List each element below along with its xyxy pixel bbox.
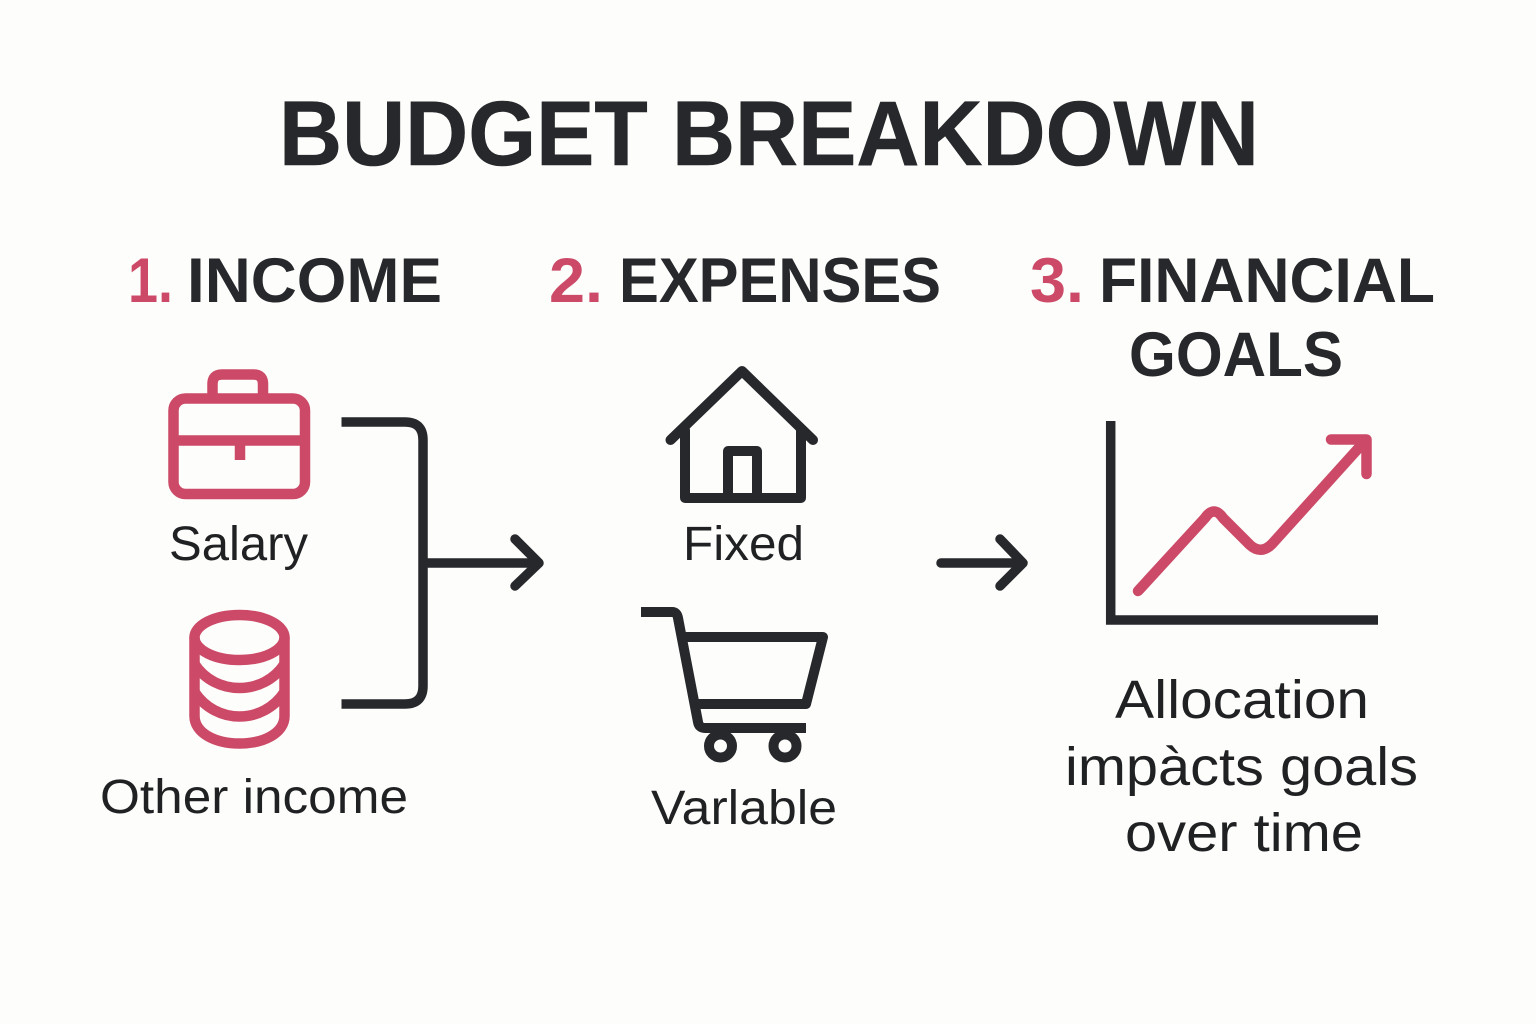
text: allocation note: Allocation	[1115, 670, 1369, 730]
icon: shopping cart	[641, 612, 823, 758]
text: allocation note: impàcts goals	[1065, 737, 1418, 797]
heading: financial goals: GOALS	[1129, 320, 1343, 390]
icon: coin stack	[194, 615, 284, 744]
icon: briefcase	[174, 374, 305, 494]
label: fixed: Fixed	[683, 518, 804, 571]
text: allocation note: over time	[1125, 803, 1363, 863]
axes	[1111, 421, 1378, 620]
heading: expenses: EXPENSES	[619, 246, 941, 316]
arrow: expenses to goals	[941, 539, 1023, 586]
heading: financial goals: FINANCIAL	[1099, 246, 1435, 316]
text: allocation note	[1065, 670, 1418, 863]
heading: expenses: 2.	[549, 246, 603, 316]
label: salary: Salary	[169, 518, 308, 571]
label: variable: Varlable	[651, 782, 837, 835]
heading: income: INCOME	[187, 246, 442, 316]
heading: financial goals: 3.	[1030, 246, 1084, 316]
arrow head	[1331, 440, 1366, 474]
label: other income: Other income	[100, 771, 408, 824]
chart: growth line	[1111, 421, 1378, 620]
trend line	[1138, 441, 1365, 591]
title: BUDGET BREAKDOWN	[279, 83, 1259, 185]
icon: house	[670, 371, 813, 498]
heading: financial goals	[1030, 246, 1435, 390]
heading: income: 1.	[128, 246, 173, 316]
arrow: bracket from income to expenses	[342, 422, 539, 704]
